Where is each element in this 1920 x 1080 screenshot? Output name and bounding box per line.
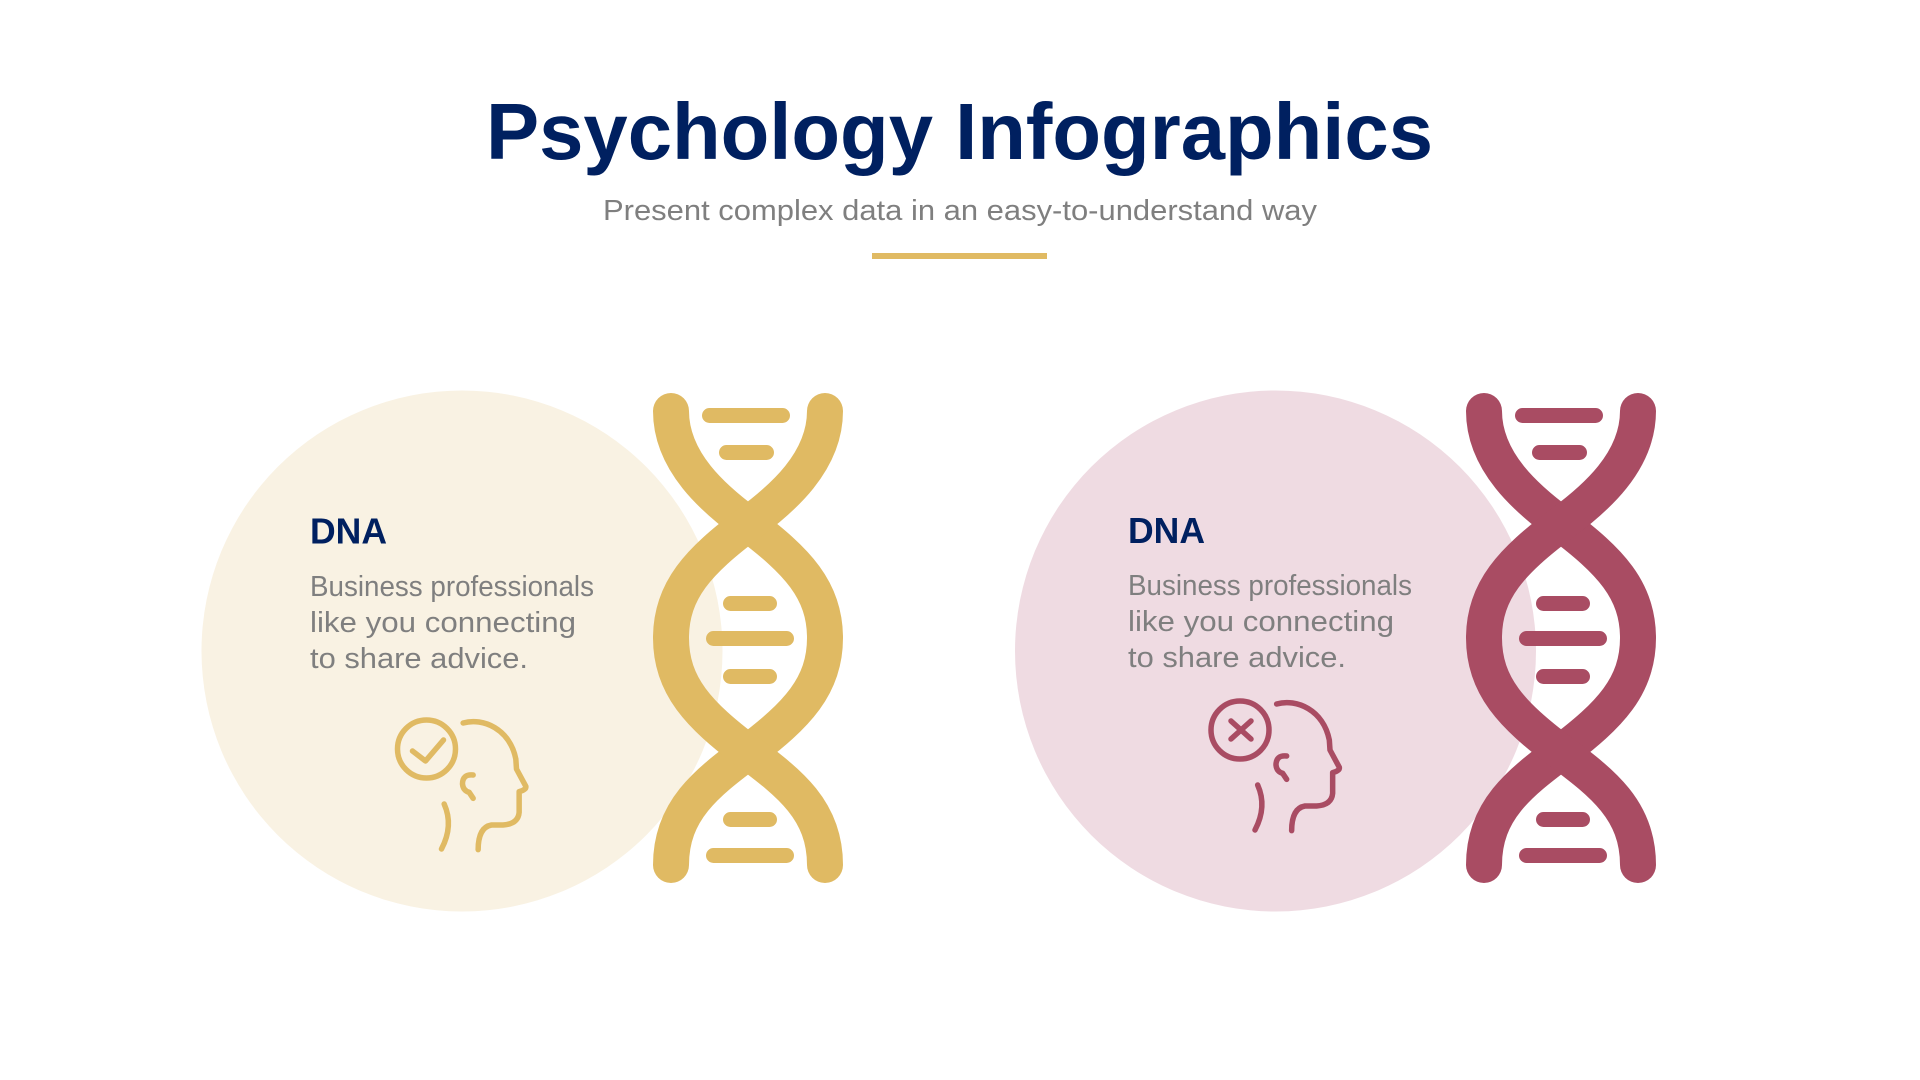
text block: right description: Business professionals: [1128, 570, 1412, 602]
text block: left description: Business professionals: [310, 571, 594, 603]
text block: left description: to share advice.: [310, 643, 528, 675]
title: Psychology Infographics: [486, 87, 1433, 176]
text block: right description: like you connecting: [1128, 606, 1394, 638]
icon: head with cross mark: [1211, 701, 1339, 831]
heading underline: [872, 253, 1047, 259]
icon: red DNA helix: [1484, 408, 1638, 865]
heading: left DNA: DNA: [310, 510, 387, 552]
heading: right DNA: DNA: [1128, 510, 1205, 551]
text block: right description: [1128, 570, 1412, 674]
panel: right DNA card: [1015, 390, 1638, 912]
subtitle: Present complex data in an easy-to-understand way: [603, 195, 1318, 227]
icon: head with check mark: [398, 720, 526, 850]
text block: right description: to share advice.: [1128, 642, 1346, 674]
circle background: left: [202, 390, 722, 912]
circle background: right: [1015, 390, 1536, 912]
panel: left DNA card: [202, 390, 825, 912]
text block: left description: [310, 571, 594, 675]
text block: left description: like you connecting: [310, 607, 576, 639]
icon: gold DNA helix: [671, 408, 825, 865]
